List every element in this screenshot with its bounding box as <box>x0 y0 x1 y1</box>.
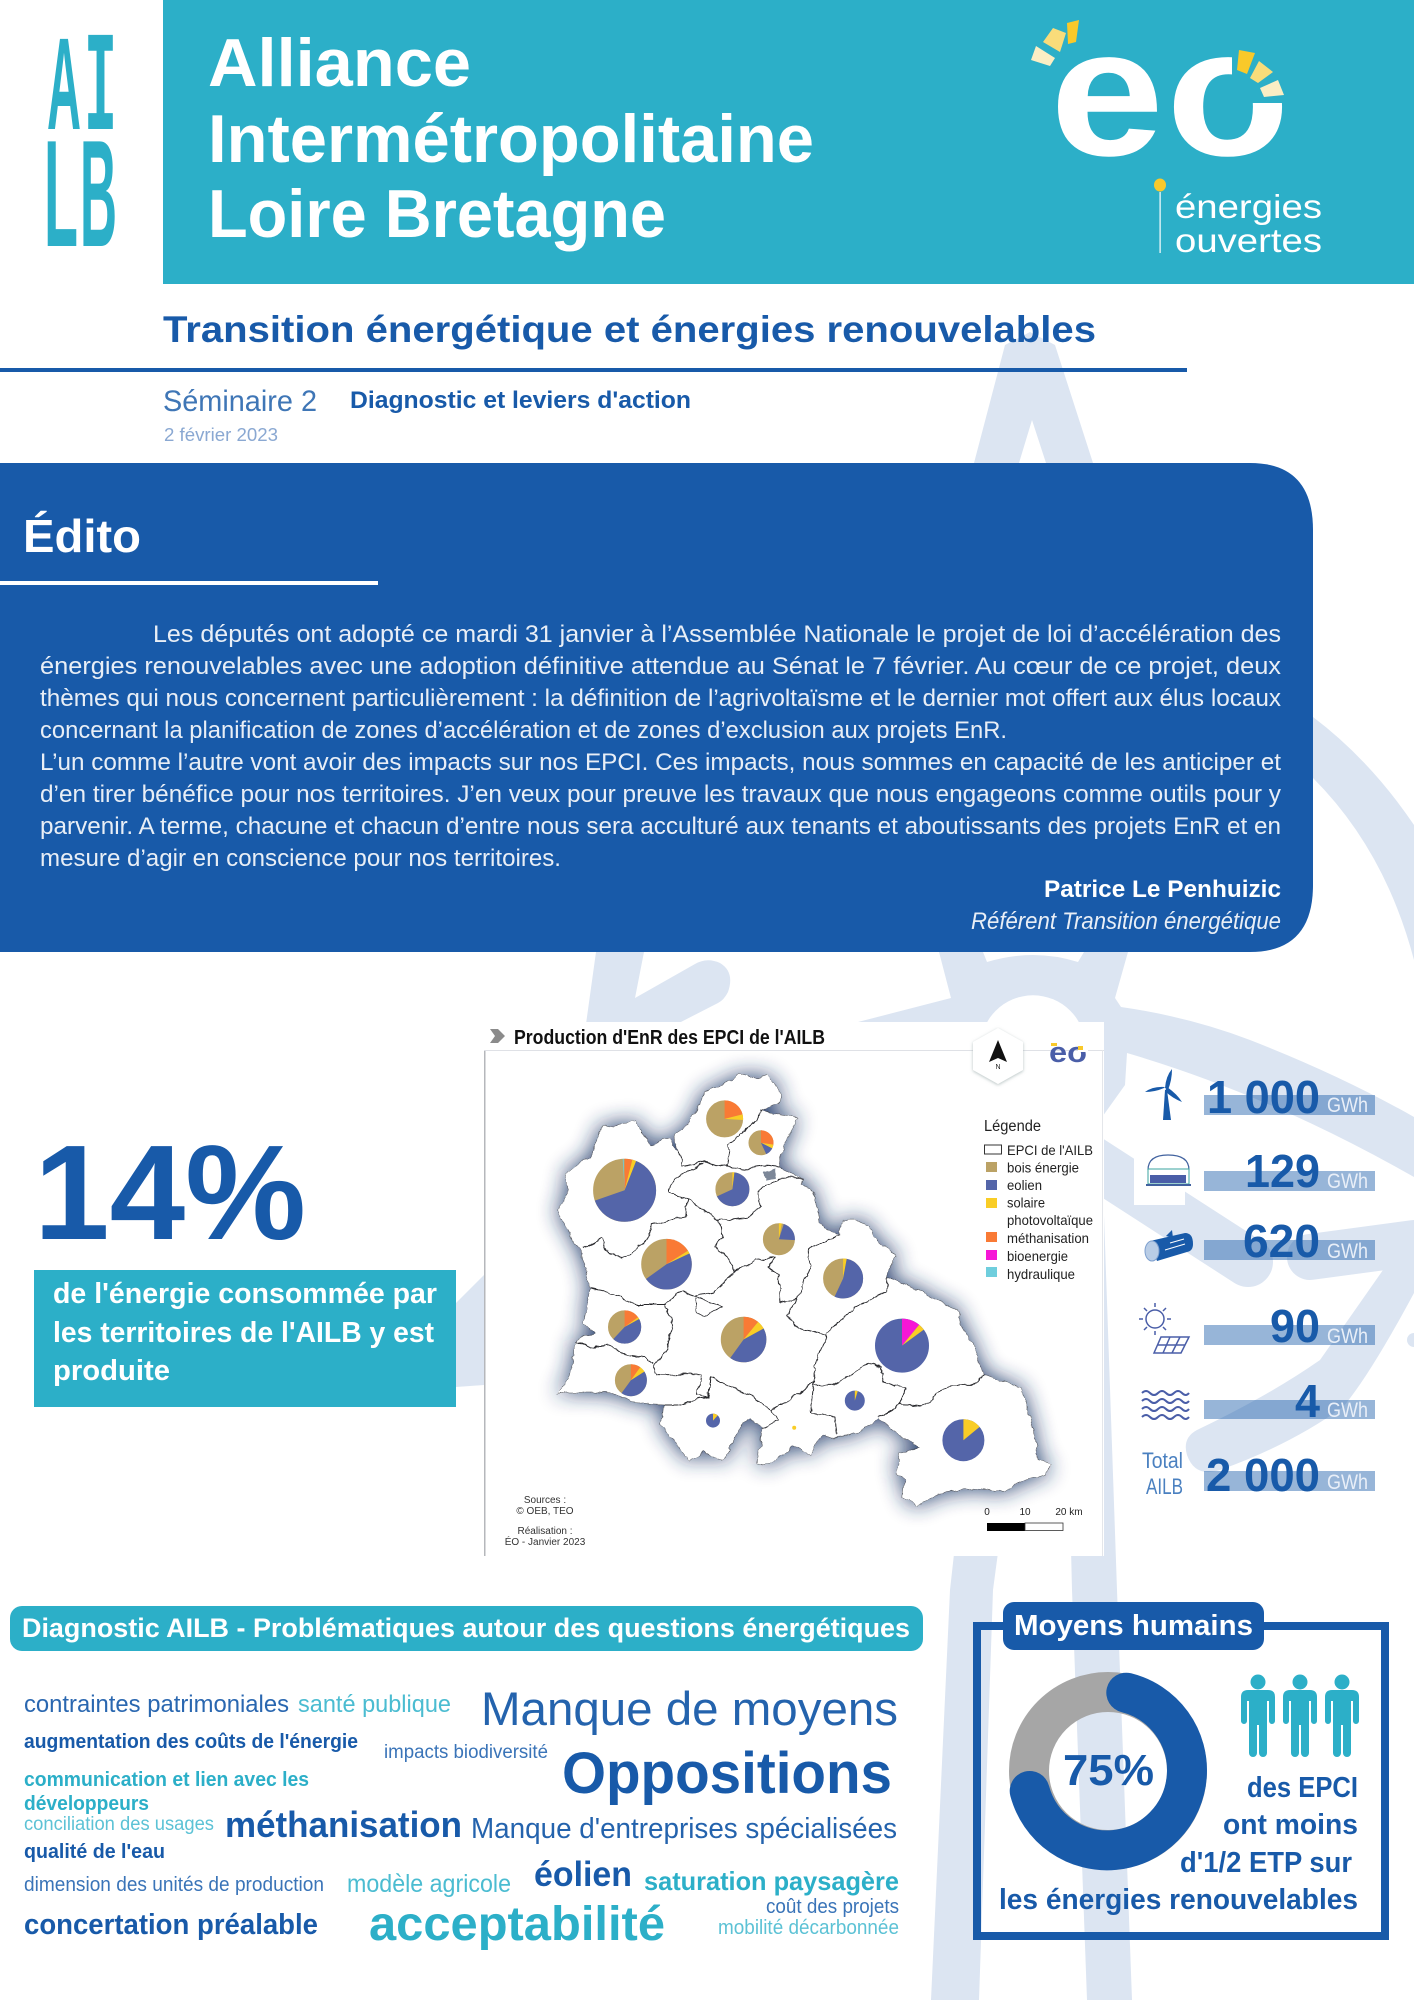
word cloud: contraintes patrimoniales <box>24 1691 289 1718</box>
row: solar <box>1139 1300 1375 1353</box>
map scale bar: 10 <box>1019 1507 1031 1518</box>
stat caption box: de l'énergie consommée par <box>53 1278 437 1310</box>
donut chart 75%: 75% <box>1063 1746 1154 1795</box>
row: hydro: GWh <box>1327 1399 1368 1422</box>
édito body text: L’un comme l’autre vont avoir des impacts sur nos EPCI. Ces impacts, nous sommes en capacité de les anticiper et <box>40 749 1281 776</box>
panel: production by source in GWh <box>1139 1069 1375 1501</box>
map scale bar <box>984 1507 1083 1531</box>
row: total <box>1142 1448 1375 1501</box>
total label <box>1142 1448 1183 1499</box>
diagnostic heading <box>10 1606 923 1651</box>
signature: Patrice Le Penhuizic <box>1044 876 1281 903</box>
map sources: Réalisation : <box>517 1526 573 1537</box>
map sources: © OEB, TEO <box>516 1506 574 1517</box>
map sources <box>505 1495 586 1548</box>
seminar line: 2 février 2023 <box>164 425 278 445</box>
icon: biogas digester <box>1146 1155 1191 1186</box>
édito body text: d’en tirer bénéfice pour nos territoires. J’en veux pour preuve les travaux que nous engageons comme outils pour y <box>40 781 1281 808</box>
map legend: photovoltaïque <box>1007 1212 1093 1228</box>
word cloud: développeurs <box>24 1793 149 1815</box>
row: total: 2 000 <box>1206 1449 1320 1501</box>
word cloud: concertation préalable <box>24 1909 318 1941</box>
signature: Référent Transition énergétique <box>971 908 1281 935</box>
moyens humains text: les énergies renouvelables <box>999 1884 1358 1916</box>
donut chart 75% <box>1029 1692 1187 1850</box>
signature <box>971 876 1281 935</box>
row: wind: GWh <box>1327 1094 1368 1117</box>
moyens humains heading: Moyens humains <box>1014 1610 1253 1642</box>
word cloud: qualité de l'eau <box>24 1841 165 1863</box>
word cloud: santé publique <box>298 1691 451 1718</box>
word cloud: impacts biodiversité <box>384 1742 548 1763</box>
édito heading: Édito <box>23 510 141 562</box>
header banner <box>163 0 1414 284</box>
word cloud: éolien <box>534 1855 632 1894</box>
stat: 14%: 14% <box>34 1117 306 1268</box>
seminar line: Séminaire 2 <box>163 385 317 418</box>
icon: three people <box>1241 1674 1359 1757</box>
word cloud: modèle agricole <box>347 1870 511 1898</box>
map legend: hydraulique <box>1007 1266 1075 1282</box>
map sources: ÉO - Janvier 2023 <box>505 1535 586 1548</box>
panel: diagnostic word cloud <box>10 1606 923 1951</box>
seminar line <box>163 385 691 445</box>
banner title <box>208 25 814 252</box>
logo: eo énergies ouvertes: ouvertes <box>1175 222 1322 259</box>
édito body text <box>40 621 1281 872</box>
left logo: AILB: A <box>47 11 81 157</box>
map title: Production d'EnR des EPCI de l'AILB <box>514 1027 825 1049</box>
row: wood: 620 <box>1243 1215 1320 1267</box>
word cloud: communication et lien avec les <box>24 1769 309 1791</box>
row: wind: 1 000 <box>1207 1071 1320 1123</box>
moyens humains text: ont moins <box>1223 1809 1358 1841</box>
row: solar: GWh <box>1327 1325 1368 1348</box>
map legend: Légende <box>984 1118 1041 1135</box>
édito body text: mesure d’agir en conscience pour nos territoires. <box>40 845 561 872</box>
background: pylon and orbit bands <box>456 332 1414 2000</box>
logo: eo énergies ouvertes: énergies <box>1175 188 1322 225</box>
édito body text: concernant la planification de zones d’accélération et de zones d’exclusion aux projets EnR. <box>40 717 1007 744</box>
moyens humains text: d'1/2 ETP sur <box>1180 1847 1352 1879</box>
word cloud: augmentation des coûts de l'énergie <box>24 1731 358 1753</box>
icon: sun and solar panel <box>1139 1303 1189 1353</box>
map legend: méthanisation <box>1007 1230 1089 1246</box>
word cloud: coût des projets <box>766 1896 899 1918</box>
total label: Total <box>1142 1448 1183 1473</box>
icon: wood log <box>1145 1230 1193 1261</box>
word cloud: conciliation des usages <box>24 1814 214 1835</box>
stat caption box <box>34 1270 456 1407</box>
row: wood: GWh <box>1327 1240 1368 1263</box>
word cloud: méthanisation <box>225 1804 462 1845</box>
word cloud <box>24 1682 899 1951</box>
édito body text: énergies renouvelables avec une adoption définitive attendue au Sénat le 7 février. Au cœur de ce projet, deux <box>40 653 1281 680</box>
word cloud: saturation paysagère <box>644 1866 899 1896</box>
row: wood <box>1145 1215 1375 1267</box>
map legend: solaire <box>1007 1194 1045 1210</box>
row: wind <box>1145 1069 1375 1123</box>
map scale bar: 0 <box>984 1507 990 1518</box>
édito body text: thèmes qui nous concernent particulièrement : la définition de l’agrivoltaïsme et le dernier mot offert aux élus locaux <box>40 685 1281 712</box>
map territories <box>555 1074 1050 1506</box>
row: solar: 90 <box>1270 1300 1320 1352</box>
word cloud: acceptabilité <box>369 1898 665 1951</box>
map legend: bois énergie <box>1007 1160 1079 1176</box>
row: biogas: 129 <box>1245 1145 1320 1197</box>
diagnostic heading: Diagnostic AILB - Problématiques autour des questions énergétiques <box>22 1613 910 1643</box>
row: biogas: GWh <box>1327 1170 1368 1193</box>
subtitle: Transition énergétique et énergies renouvelables <box>163 309 1096 350</box>
word cloud: mobilité décarbonnée <box>718 1917 899 1939</box>
panel: map of EnR production <box>484 1022 1104 1556</box>
map title icon <box>490 1029 505 1043</box>
total label: AILB <box>1146 1474 1183 1499</box>
logo: eo énergies ouvertes <box>1031 0 1322 259</box>
panel: édito <box>0 463 1313 952</box>
row: biogas <box>1146 1145 1375 1197</box>
north arrow: N <box>995 1064 1001 1071</box>
édito body text: parvenir. A terme, chacune et chacun d’entre nous sera acculturé aux tenants et aboutissants des projets EnR et en <box>40 813 1281 840</box>
moyens humains text <box>999 1772 1358 1916</box>
left logo: AILB <box>44 11 117 279</box>
word cloud: Manque de moyens <box>481 1682 898 1735</box>
map legend: EPCI de l'AILB <box>1007 1142 1093 1158</box>
banner title: Intermétropolitaine <box>208 101 814 177</box>
map scale bar: 20 km <box>1055 1507 1083 1518</box>
word cloud: Manque d'entreprises spécialisées <box>471 1813 897 1845</box>
row: hydro: 4 <box>1295 1375 1320 1427</box>
word cloud: dimension des unités de production <box>24 1874 324 1896</box>
north arrow <box>973 1028 1023 1084</box>
banner title: Alliance <box>208 25 471 101</box>
left logo: AILB: I <box>84 11 117 173</box>
left logo: AILB: L <box>44 110 78 279</box>
mini eo logo: eo <box>1049 1037 1087 1069</box>
seminar line: Diagnostic et leviers d'action <box>350 387 691 414</box>
icon: waves <box>1142 1391 1189 1419</box>
panel: moyens humains <box>977 1602 1385 1936</box>
word cloud: Oppositions <box>562 1741 892 1806</box>
map legend <box>984 1118 1093 1282</box>
édito body text: Les députés ont adopté ce mardi 31 janvier à l’Assemblée Nationale le projet de loi d’accélération des <box>153 621 1281 648</box>
map sources: Sources : <box>524 1495 566 1506</box>
pie charts by EPCI <box>609 1110 974 1451</box>
map legend: bioenergie <box>1007 1248 1068 1264</box>
moyens humains text: des EPCI <box>1247 1772 1358 1804</box>
stat: 14% <box>34 1117 456 1407</box>
banner title: Loire Bretagne <box>208 176 666 252</box>
moyens humains heading <box>1003 1602 1264 1650</box>
stat caption box: produite <box>53 1355 170 1387</box>
stat caption box: les territoires de l'AILB y est <box>53 1317 434 1349</box>
row: hydro <box>1142 1375 1375 1427</box>
map legend: eolien <box>1007 1177 1042 1193</box>
row: total: GWh <box>1327 1471 1368 1494</box>
icon: wind turbine <box>1145 1069 1182 1120</box>
left logo: AILB: B <box>80 110 117 279</box>
